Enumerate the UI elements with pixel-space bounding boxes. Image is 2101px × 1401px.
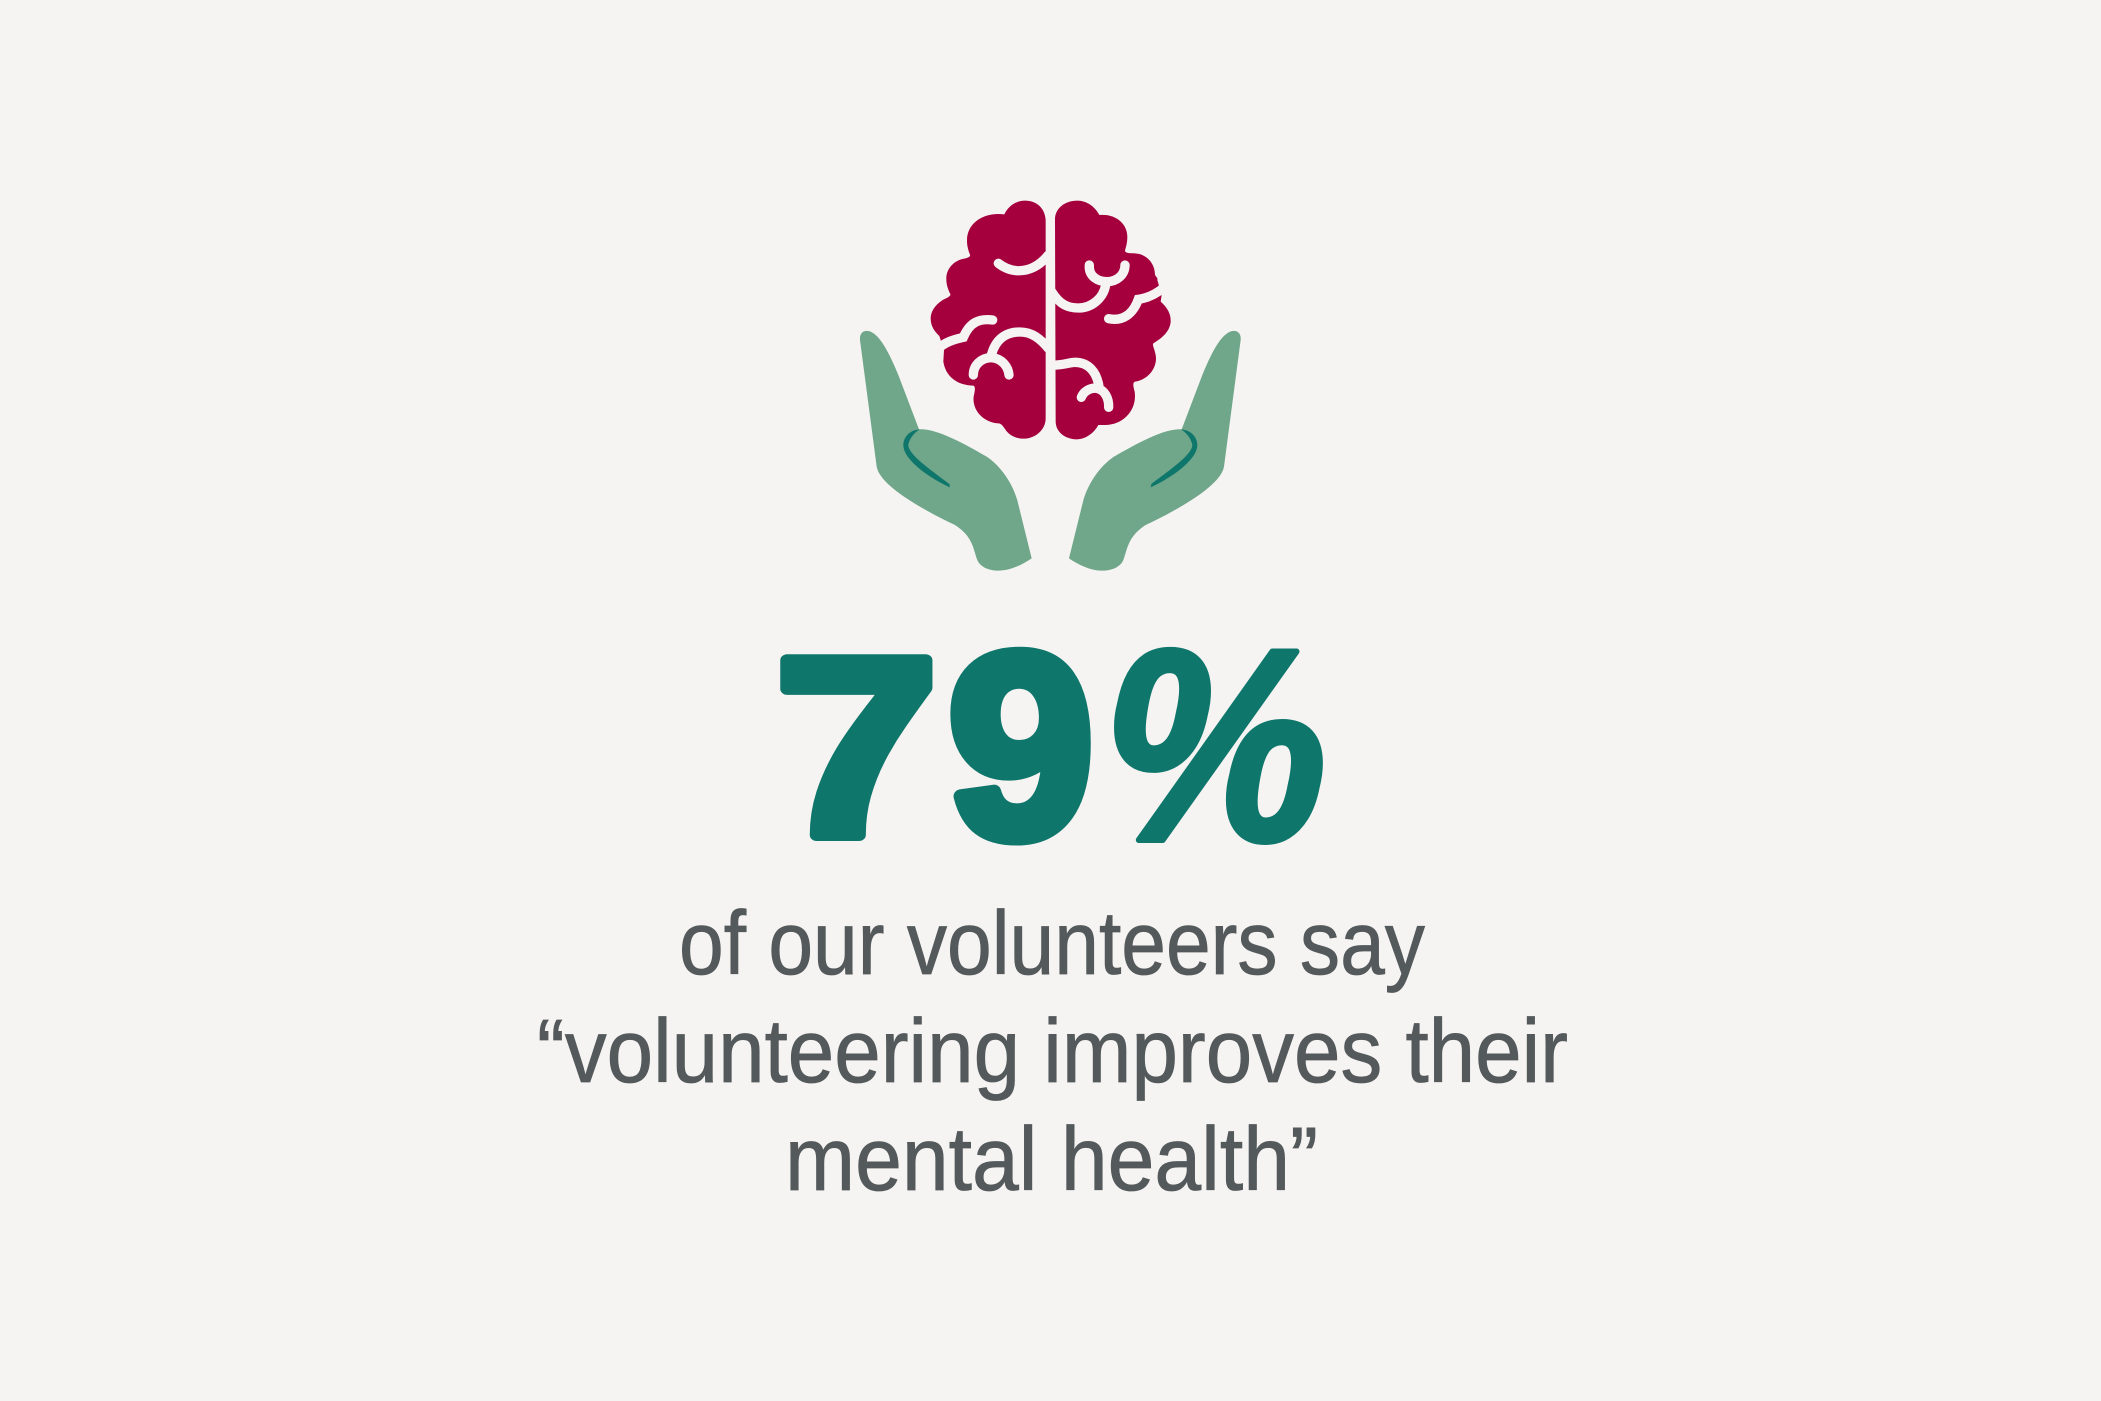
icon: brain: [931, 201, 1171, 439]
big number: 79%: [775, 592, 1327, 898]
icon: brain held by two hands: [860, 201, 1241, 571]
big number: 79%: 7: [775, 606, 938, 889]
big number: 79%: 9: [948, 601, 1093, 892]
caption line 2: “volunteering improves their: [537, 1002, 1568, 1102]
big number: 79%: %: [1103, 592, 1327, 898]
caption line 3: mental health”: [785, 1110, 1318, 1210]
caption line 1: of our volunteers say: [679, 894, 1425, 994]
icon: left hand: [860, 331, 1032, 571]
icon: right hand: [1069, 331, 1241, 571]
text block: caption: [537, 894, 1568, 1210]
